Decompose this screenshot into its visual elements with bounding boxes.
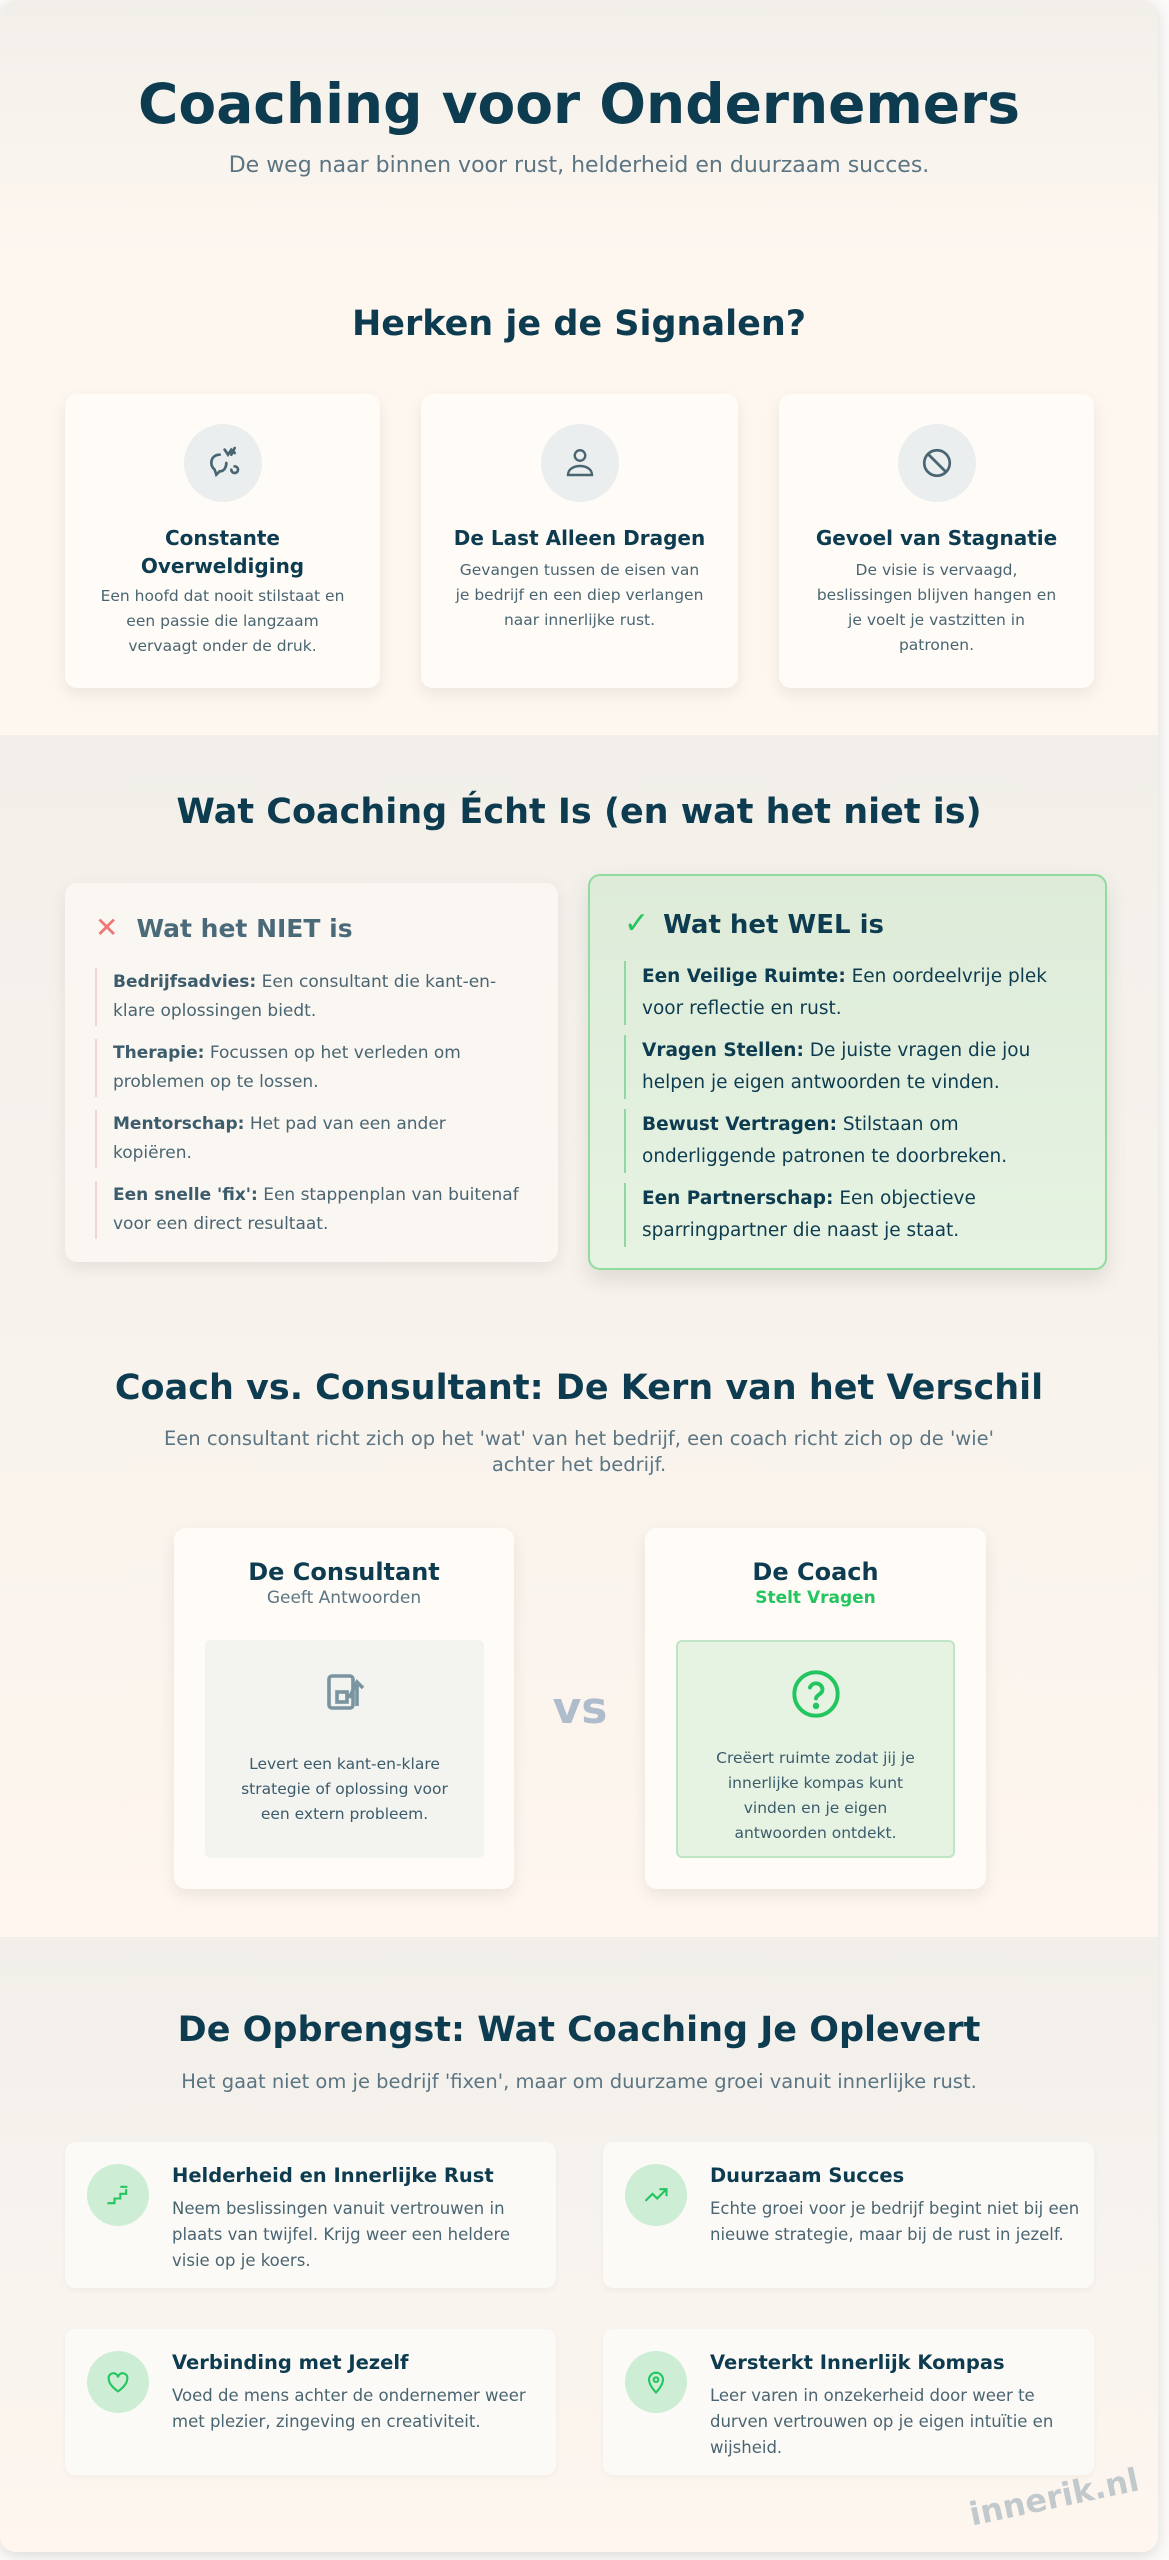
card: consultant: Geeft Antwoorden xyxy=(267,1588,421,1608)
subtitle: De weg naar binnen voor rust, helderheid en duurzaam succes. xyxy=(229,153,929,178)
panel: niet: Een snelle 'fix': Een stappenplan van buitenaf voor een direct resultaat. xyxy=(113,1185,519,1234)
panel: wel xyxy=(588,874,1107,1270)
benefit: verbinding: Verbinding met Jezelf xyxy=(172,2351,409,2374)
card: overweldiging: Constante xyxy=(165,526,280,550)
box: coach questions xyxy=(676,1640,955,1858)
benefit: helderheid xyxy=(65,2142,556,2288)
benefit: duurzaam succes xyxy=(603,2142,1094,2288)
panel: wel: Een Partnerschap: Een objectieve sparringpartner die naast je staat. xyxy=(642,1188,976,1241)
panel: wel: Een Veilige Ruimte: Een oordeelvrije plek voor reflectie en rust. xyxy=(642,966,1047,1019)
benefit: kompas: Versterkt Innerlijk Kompas xyxy=(710,2351,1005,2374)
subtitle: coach vs consultant: Een consultant richt zich op het 'wat' van het bedrijf, een coach richt zich op de 'wie' achter het bedrijf. xyxy=(164,1427,994,1476)
icon: user xyxy=(540,424,618,502)
benefit: duurzaam succes: Echte groei voor je bedrijf begint niet bij een nieuwe strategie, maar bij de rust in jezelf. xyxy=(710,2199,1079,2244)
benefit: duurzaam succes: Duurzaam Succes xyxy=(710,2164,904,2187)
card: coach xyxy=(645,1528,986,1889)
card: last alleen xyxy=(421,394,738,688)
panel: wel: Vragen Stellen: De juiste vragen die jou helpen je eigen antwoorden te vinden. xyxy=(642,1040,1030,1093)
icon: trend xyxy=(625,2164,687,2226)
icon: strategy xyxy=(327,1674,364,1710)
card: coach: De Coach xyxy=(752,1558,879,1586)
box: consultant answer xyxy=(205,1640,484,1858)
icon: steps xyxy=(87,2164,149,2226)
card: last alleen: De Last Alleen Dragen xyxy=(454,526,705,550)
icon: pin xyxy=(625,2351,687,2413)
benefit: kompas xyxy=(603,2329,1094,2475)
card: overweldiging xyxy=(65,394,380,688)
panel: niet: Mentorschap: Het pad van een ander kopiëren. xyxy=(113,1114,446,1163)
panel: niet xyxy=(65,883,558,1262)
heading: wel: ✓ Wat het WEL is xyxy=(624,906,884,941)
title: Coaching voor Ondernemers xyxy=(138,72,1020,136)
card: overweldiging: Een hoofd dat nooit stilstaat en een passie die langzaam vervaagt onder de druk. xyxy=(101,587,344,655)
card: stagnatie xyxy=(779,394,1094,688)
benefit: helderheid: Helderheid en Innerlijke Rust xyxy=(172,2164,494,2187)
subtitle: opbrengst: Het gaat niet om je bedrijf 'fixen', maar om duurzame groei vanuit innerlijke rust. xyxy=(181,2070,977,2093)
benefit: kompas: Leer varen in onzekerheid door weer te durven vertrouwen op je eigen intuïtie en wijsheid. xyxy=(710,2386,1053,2457)
box: coach questions: Creëert ruimte zodat jij je innerlijke kompas kunt vinden en je eigen antwoorden ontdekt. xyxy=(716,1749,915,1842)
card: coach: Stelt Vragen xyxy=(755,1588,876,1608)
card: consultant: De Consultant xyxy=(248,1558,440,1586)
benefit: verbinding xyxy=(65,2329,556,2475)
icon: overwhelm xyxy=(184,424,262,502)
card: consultant xyxy=(174,1528,514,1889)
heading: opbrengst: De Opbrengst: Wat Coaching Je Oplevert xyxy=(178,2010,980,2050)
panel: wel: Bewust Vertragen: Stilstaan om onderliggende patronen te doorbreken. xyxy=(642,1114,1007,1167)
watermark: innerik.nl xyxy=(966,2461,1142,2533)
card: last alleen: Gevangen tussen de eisen van je bedrijf en een diep verlangen naar innerlijke rust. xyxy=(456,561,703,629)
icon: question xyxy=(792,1670,840,1718)
panel: niet: Bedrijfsadvies: Een consultant die kant-en-klare oplossingen biedt. xyxy=(113,972,496,1021)
icon: heart xyxy=(87,2351,149,2413)
heading: signalen: Herken je de Signalen? xyxy=(352,304,806,344)
heading: coach vs consultant: Coach vs. Consultant: De Kern van het Verschil xyxy=(115,1368,1043,1408)
panel: niet: Therapie: Focussen op het verleden om problemen op te lossen. xyxy=(113,1043,461,1092)
vs label: vs xyxy=(553,1683,607,1734)
benefit: verbinding: Voed de mens achter de ondernemer weer met plezier, zingeving en creativiteit. xyxy=(172,2386,526,2431)
icon: ban xyxy=(898,424,976,502)
card: overweldiging: Overweldiging xyxy=(141,554,304,578)
heading: niet: ✕ Wat het NIET is xyxy=(95,911,353,944)
box: consultant answer: Levert een kant-en-klare strategie of oplossing voor een extern probleem. xyxy=(241,1755,448,1823)
heading: wat coaching echt is: Wat Coaching Écht Is (en wat het niet is) xyxy=(176,792,982,832)
benefit: helderheid: Neem beslissingen vanuit vertrouwen in plaats van twijfel. Krijg weer een heldere visie op je koers. xyxy=(172,2199,510,2270)
card: stagnatie: De visie is vervaagd, beslissingen blijven hangen en je voelt je vastzitten in patronen. xyxy=(817,561,1056,654)
card: stagnatie: Gevoel van Stagnatie xyxy=(816,526,1057,550)
